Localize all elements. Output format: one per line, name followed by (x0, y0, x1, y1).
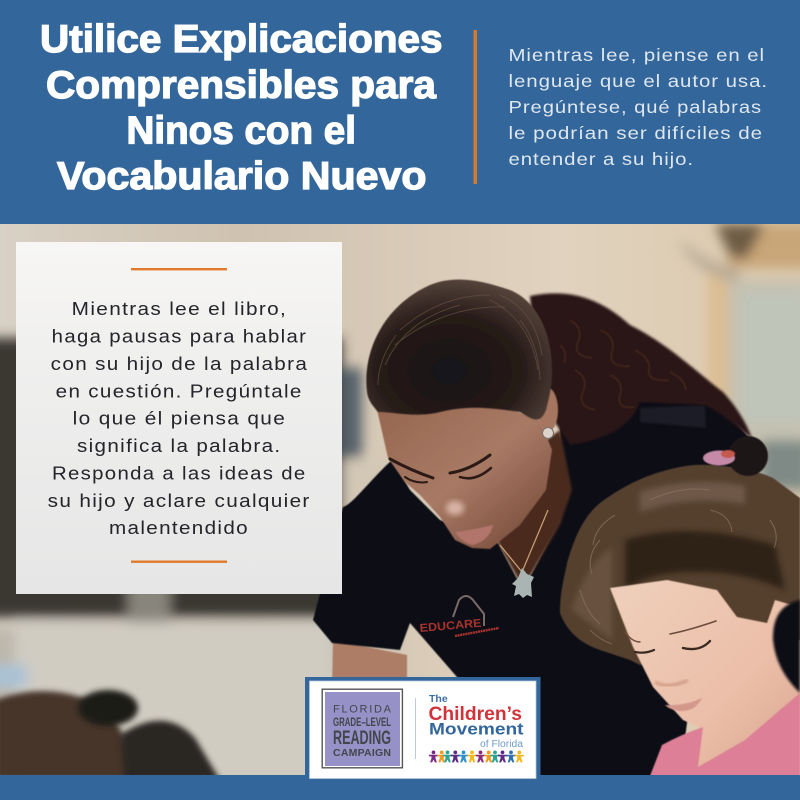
logo: The Children's Movement of Florida: The (429, 693, 448, 705)
card body text: lo que él piensa que (73, 408, 286, 429)
intro text: lenguaje que el autor usa. (508, 71, 768, 91)
child: hair curls (580, 489, 776, 644)
woman: ear (538, 388, 558, 432)
card body text: en cuestión. Pregúntale (56, 380, 303, 401)
title: Vocabulario Nuevo (57, 155, 426, 198)
intro text: entender a su hijo. (508, 149, 694, 169)
woman: black polo shirt (313, 395, 760, 776)
intro text (508, 45, 768, 169)
title (40, 18, 442, 198)
woman: shirt collar highlight (640, 405, 706, 428)
card bottom orange rule (131, 560, 227, 563)
woman: long curly hair (530, 293, 752, 445)
child: nose shade (655, 680, 688, 686)
card body text: significa la palabra. (77, 435, 282, 456)
logo: The Children's Movement of Florida: of Florida (480, 739, 523, 750)
title: Utilice Explicaciones (40, 18, 442, 61)
foreground child hair with bun: bottom left (78, 690, 220, 780)
title: Ninos con el (126, 110, 356, 152)
logo: The Children's Movement of Florida: Movement (429, 720, 524, 738)
card body text: con su hijo de la palabra (51, 353, 308, 374)
woman: necklace and pendant (500, 510, 548, 598)
logo box white background (310, 681, 536, 778)
woman: Educare shirt logo (419, 596, 499, 636)
woman: Educare shirt logo: EDUCARE (419, 618, 482, 635)
panel: explanation card (16, 242, 342, 594)
woman: mouth (455, 525, 493, 545)
child: hair shading (572, 482, 785, 640)
woman: arm (332, 640, 407, 690)
top blue header band (0, 0, 800, 224)
intro text: Mientras lee, piense en el (508, 45, 765, 65)
logo: Florida Grade-Level Reading Campaign: GRADE–LEVEL (333, 717, 391, 729)
woman: hair strand texture (378, 295, 542, 385)
title: Comprensibles para (46, 64, 437, 107)
intro text: le podrían ser difíciles de (508, 123, 763, 143)
bottom blue band (0, 775, 800, 800)
logo: Florida Grade-Level Reading Campaign: READING (333, 728, 391, 749)
photo: teacher and child reading (0, 224, 800, 788)
child: eyes and brows (625, 621, 716, 653)
row of paper-doll children (429, 750, 524, 762)
dark foreground shape at right (773, 600, 800, 693)
woman: earring (542, 428, 554, 438)
card top orange rule (131, 268, 227, 270)
orange vertical divider (474, 30, 477, 184)
child: face and neck (610, 580, 800, 776)
logo: The Children's Movement of Florida (428, 693, 524, 762)
card body text: malentendido (109, 517, 249, 538)
woman: neck (498, 430, 572, 588)
logo: Florida Grade-Level Reading Campaign (322, 689, 402, 768)
card body text: Responda a las ideas de (52, 462, 306, 483)
card body text: Mientras lee el libro, (72, 298, 287, 319)
woman: eyebrows and eyes (390, 455, 491, 482)
logo divider (415, 698, 416, 759)
child: pink shirt (650, 693, 800, 776)
card body text (48, 298, 311, 538)
photo background: blurred classroom (0, 224, 800, 788)
woman: pulled-back hair (366, 280, 552, 420)
woman: face (376, 405, 552, 549)
woman: nose highlight (446, 501, 464, 515)
card body text: haga pausas para hablar (52, 326, 307, 346)
logo: Florida Grade-Level Reading Campaign: FLORIDA (333, 704, 392, 716)
child: lips (665, 698, 702, 711)
child: pink scrunchie (703, 450, 735, 466)
intro text: Pregúntese, qué palabras (508, 97, 762, 117)
logo box frame (305, 677, 540, 780)
foreground child head: bottom left (0, 691, 136, 780)
logo: Florida Grade-Level Reading Campaign: CAMPAIGN (333, 747, 391, 759)
card body text: su hijo y aclare cualquier (48, 490, 311, 511)
card background (16, 242, 342, 594)
child: hair bun (728, 436, 768, 476)
woman: hair curl texture (560, 320, 686, 410)
logo box (305, 677, 540, 780)
logo: The Children's Movement of Florida: Children’s (428, 704, 522, 725)
child: curly hair (560, 465, 800, 665)
